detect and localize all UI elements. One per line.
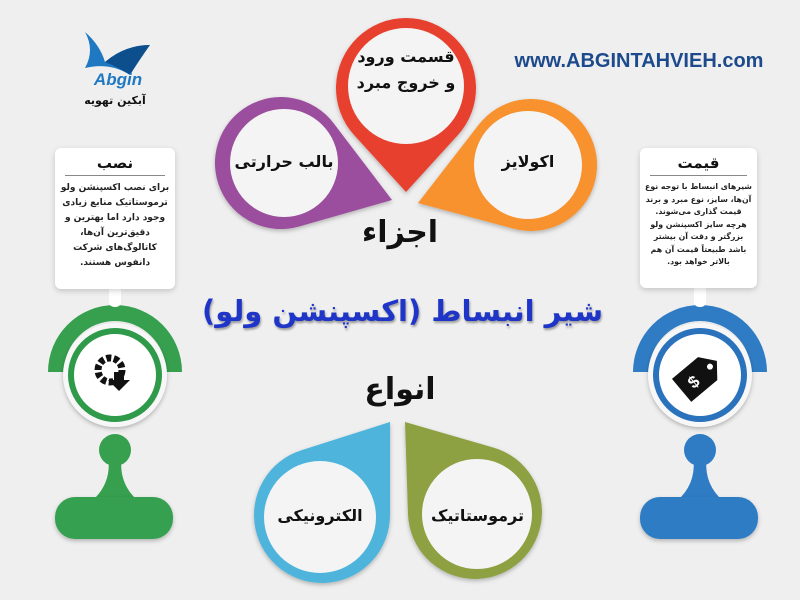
pin: olive <box>405 422 542 579</box>
heading: parts: اجزاء <box>362 215 438 250</box>
pin label: olive: ترموستاتیک <box>431 506 524 525</box>
blue price icon block <box>633 305 767 539</box>
pin: orange <box>418 99 597 231</box>
card: price: قیمت <box>678 154 719 172</box>
pin label: orange: اکولایز <box>502 152 554 171</box>
pin label: light blue: الکترونیکی <box>277 506 363 525</box>
blue price icon block: $ <box>684 371 704 392</box>
card: price <box>640 148 757 288</box>
pin label: red <box>357 47 455 92</box>
logo: آبکین تهویه <box>84 93 146 107</box>
pin label: red: قسمت ورود <box>357 47 455 66</box>
card tails <box>109 285 706 307</box>
heading: types: انواع <box>364 372 436 407</box>
card: install: نصب <box>97 154 133 172</box>
logo <box>84 32 150 107</box>
pin: purple <box>215 97 392 229</box>
main title: شیر انبساط (اکسپنشن ولو) <box>202 294 603 328</box>
card: price: شیرهای انبساط با توجه نوع آن‌ها، سایز، نوع مبرد و برند قیمت گذاری می‌شوند. هرچه سایز اکسپنشن ولو بزرگتر و دقت آن بیشتر باشد طبیعتاً قیمت آن هم بالاتر خواهد بود. <box>645 182 752 266</box>
green install icon block <box>48 305 182 539</box>
card: install: برای نصب اکسپنشن ولو ترموستاتیک منابع زیادی وجود دارد اما بهترین و دقیق‌ترین آن‌ها، کاتالوگ‌های شرکت دانفوس هستند. <box>61 183 169 268</box>
pin: red <box>336 18 476 192</box>
logo: Abgin <box>93 70 142 89</box>
pin label: red: و خروج مبرد <box>357 73 455 92</box>
pin: light blue <box>254 422 390 583</box>
pin label: purple: بالب حرارتی <box>235 152 333 171</box>
url: www.ABGINTAHVIEH.com <box>515 50 763 72</box>
card: install <box>55 148 175 289</box>
